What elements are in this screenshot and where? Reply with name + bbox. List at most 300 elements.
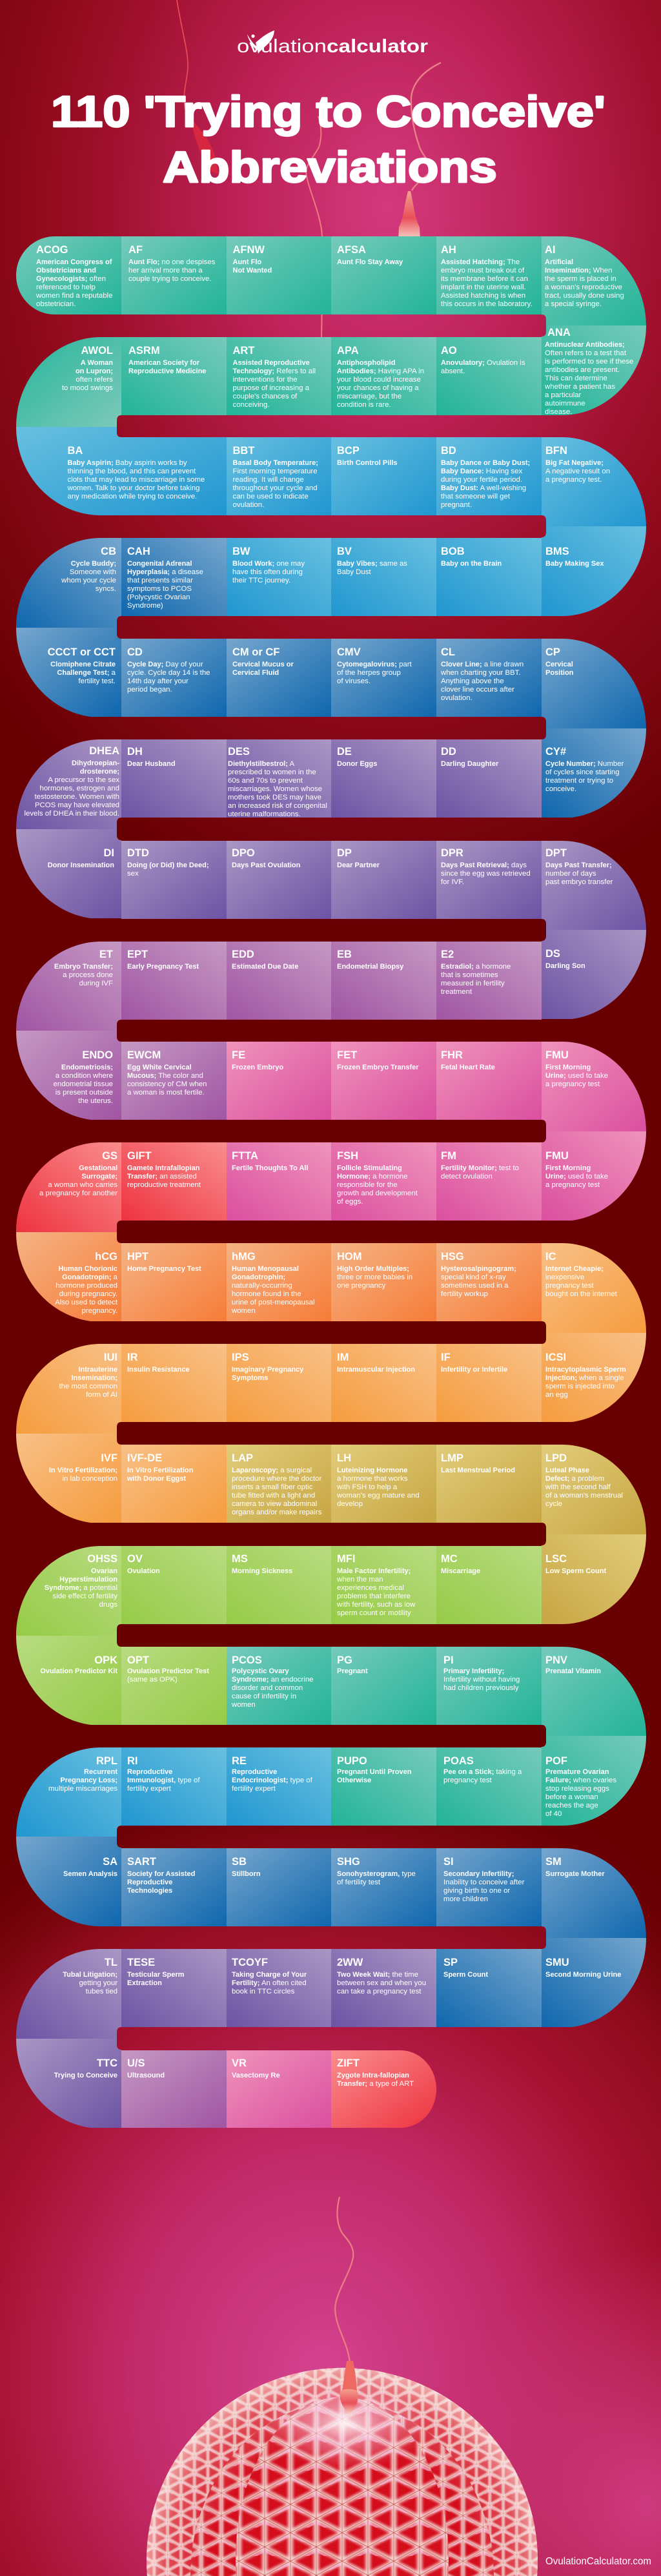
- row 6: CY#: treatment or trying to: [545, 776, 613, 784]
- row 19: VR: [227, 2050, 331, 2128]
- row 15: PCOS: Syndrome; an endocrine: [232, 1676, 314, 1684]
- row 15: PNV: PNV: [545, 1654, 567, 1666]
- row 13: LMP: LMP: [441, 1452, 463, 1464]
- row 11: IC: pregnancy test: [545, 1281, 594, 1289]
- row 16: POAS: POAS: [443, 1755, 474, 1767]
- row 1: AH: this occurs in the laboratory.: [441, 300, 533, 307]
- row 9: FMU: FMU: [545, 1049, 569, 1061]
- row 6: DH: DH: [127, 746, 143, 757]
- title: 110 'Trying to Conceive': [51, 87, 605, 136]
- row 2: ANA: Antinuclear Antibodies;: [545, 341, 625, 349]
- row 15: PI: Infertility without having: [443, 1676, 520, 1684]
- row 15: OPT: Ovulation Predictor Test: [127, 1667, 209, 1675]
- row 13: LH: [331, 1445, 436, 1523]
- row 4: BMS: [542, 526, 646, 616]
- row 5: CP: CP: [545, 646, 560, 658]
- row 16: POF: stop releasing eggs: [545, 1785, 609, 1793]
- row 10: FSH: FSH: [337, 1150, 358, 1162]
- title: [51, 87, 605, 192]
- row 11: hCG: [16, 1232, 121, 1321]
- row 15: PCOS: [227, 1647, 331, 1725]
- row 18: SMU: SMU: [545, 1957, 569, 1968]
- row 16: PUPO: Pregnant Until Proven: [337, 1768, 412, 1776]
- row 7: DTD: Doing (or Did) the Deed;: [127, 861, 209, 869]
- row 4: CAH: Syndrome): [127, 602, 163, 610]
- row 2: ANA: Often refers to a test that: [545, 349, 626, 356]
- row 2: AWOL: often refers: [76, 376, 113, 384]
- row 14: MFI: problems that interfere: [337, 1592, 411, 1600]
- row 3: BD: [436, 437, 542, 515]
- row 13: IVF: IVF: [101, 1452, 117, 1464]
- row 10: FMU: Urine; used to take: [545, 1173, 608, 1180]
- row 9: FMU: First Morning: [545, 1063, 591, 1071]
- row 10: FTTA: [227, 1142, 331, 1221]
- row 10: GS: [16, 1142, 121, 1232]
- row 13: LH: LH: [337, 1452, 351, 1464]
- row 5: CL: Anything above the: [441, 677, 504, 685]
- row 3: BFN: [542, 437, 646, 526]
- row 12: IUI: Insemination;: [71, 1374, 117, 1382]
- row 17: SI: more children: [443, 1895, 488, 1902]
- row 17: SART: Reproductive: [127, 1878, 172, 1886]
- row 12: IUI: IUI: [104, 1352, 117, 1363]
- row 12: ICSI: sperm is injected into: [545, 1382, 615, 1390]
- row 7: DPT: DPT: [545, 847, 567, 859]
- row 1: AI: a special syringe.: [545, 300, 602, 307]
- row 11: hCG: during pregnancy.: [59, 1290, 117, 1298]
- row 1: AF: couple trying to conceive.: [128, 275, 212, 283]
- row 8: E2: Estradiol; a hormone: [441, 962, 511, 970]
- row 14: OHSS: drugs: [99, 1600, 117, 1608]
- bottom sperm: [335, 2197, 353, 2362]
- row 6: DES: mothers took DES may have: [228, 793, 321, 801]
- row 11: IC: [542, 1243, 646, 1333]
- row 5: CD: Cycle Day; Day of your: [127, 660, 203, 668]
- row 8: E2: that is sometimes: [441, 971, 498, 979]
- row 11: IC: IC: [545, 1251, 556, 1262]
- row 4: BV: Baby Vibes; same as: [337, 559, 407, 567]
- row 19: TTC: TTC: [97, 2057, 117, 2069]
- row 1: AI: AI: [545, 244, 555, 256]
- row 18: SMU: [542, 1938, 646, 2027]
- row 2: AWOL: [16, 337, 121, 427]
- row 3: BBT: First morning temperature: [232, 468, 318, 475]
- row 7: DI: [16, 829, 121, 918]
- row 12: ICSI: Injection; when a single: [545, 1374, 624, 1382]
- row 2: ART: ART: [232, 345, 254, 356]
- row 5: CL: [436, 639, 542, 717]
- row 2: ANA: ANA: [547, 327, 571, 338]
- row 2: ANA: This can determine: [545, 375, 607, 382]
- row 18: TCOYF: Fertility; An often cited: [232, 1979, 307, 1986]
- row 17: SI: Secondary Infertility;: [443, 1870, 514, 1878]
- row 4: BW: Blood Work; one may: [232, 559, 305, 567]
- row 8: EPT: EPT: [127, 949, 148, 960]
- row 5: CM or CF: [227, 639, 331, 717]
- row 2: APA: APA: [337, 345, 359, 356]
- logo: [237, 30, 428, 57]
- row 14: OV: OV: [127, 1553, 143, 1565]
- row 5: CD: 14th day after your: [127, 677, 188, 685]
- row 17: SART: Technologies: [127, 1887, 172, 1895]
- row 6: DHEA: Dihydroepian-: [72, 759, 119, 767]
- row 2: ART: [227, 337, 331, 415]
- row 18: 2WW: can take a pregnancy test: [337, 1988, 421, 1995]
- egg: [142, 2364, 542, 2576]
- row 2: ASRM: [121, 337, 227, 415]
- row 15: PI: [436, 1647, 542, 1725]
- row 3: BCP: BCP: [337, 445, 360, 457]
- row 2: ART: purpose of increasing a: [232, 384, 309, 391]
- row 5: CP: [542, 639, 646, 728]
- row 19: ZIFT: ZIFT: [337, 2057, 360, 2069]
- title: Abbreviations: [163, 143, 497, 192]
- row 1: ACOG: obstetrician.: [36, 300, 76, 307]
- row 7: DPR: since the egg was retrieved: [441, 869, 531, 877]
- row 2: ANA: antibodies are present.: [545, 366, 620, 373]
- row 4: CAH: that presents similar: [127, 576, 193, 584]
- row 13: LMP: [436, 1445, 542, 1523]
- row 3: BD: Baby Dust: A well-wishing: [441, 484, 526, 492]
- row 11: hMG: naturally-occurring: [232, 1281, 292, 1289]
- row 17: SB: Stillborn: [232, 1870, 261, 1878]
- row 11: HSG: [436, 1243, 542, 1321]
- row 2: AO: absent.: [441, 367, 465, 375]
- row 18: TCOYF: book in TTC circles: [232, 1988, 294, 1995]
- row 1: ACOG: Gynecologists; often: [36, 275, 106, 283]
- row 11: hMG: hormone found in the: [232, 1290, 301, 1298]
- row 11: hMG: hMG: [232, 1251, 256, 1262]
- row 9: ENDO: Endometriosis;: [61, 1063, 113, 1071]
- row 17: SI: Inability to conceive after: [443, 1878, 524, 1886]
- row 1: AF: AF: [128, 244, 143, 256]
- row 16: RPL: Recurrent: [84, 1768, 117, 1776]
- row 17: SHG: of fertility test: [337, 1878, 380, 1886]
- row 3: BBT: [227, 437, 331, 515]
- row 16: POF: Premature Ovarian: [545, 1768, 609, 1776]
- row 8: EB: Endometrial Biopsy: [337, 962, 403, 970]
- row 4: BW: BW: [232, 546, 250, 557]
- row 3: BD: Baby Dance or Baby Dust;: [441, 459, 530, 466]
- row 9: FHR: [436, 1042, 542, 1120]
- row 13: LPD: Defect; a problem: [545, 1475, 604, 1483]
- row 11: IC: Internet Cheapie;: [545, 1264, 604, 1272]
- row 4: BW: have this often during: [232, 568, 303, 576]
- row 1: AF: [121, 236, 227, 314]
- row 9: ENDO: endometrial tissue: [54, 1080, 113, 1087]
- row 11: hCG: pregnancy.: [81, 1307, 117, 1315]
- row 10: GIFT: GIFT: [127, 1150, 152, 1162]
- row 11: HOM: three or more babies in: [337, 1273, 412, 1281]
- row 10: GS: a pregnancy for another: [39, 1190, 117, 1197]
- row 3: BCP: [331, 437, 436, 515]
- row 4: CB: Someone with: [70, 568, 116, 576]
- row 7: DP: DP: [337, 847, 352, 859]
- row 19: ZIFT: Transfer; a type of ART: [337, 2079, 414, 2087]
- row 9: FMU: a pregnancy test: [545, 1080, 600, 1087]
- row 16: RI: Reproductive: [127, 1768, 172, 1776]
- row 10: GS: Gestational: [79, 1164, 117, 1171]
- row 1: AFNW: Aunt Flo: [232, 258, 261, 266]
- row 8: DS: DS: [545, 948, 560, 960]
- row 9: EWCM: consistency of CM when: [127, 1080, 207, 1087]
- row 13: IVF: in lab conception: [62, 1475, 117, 1483]
- row 14: MFI: Male Factor Infertility;: [337, 1567, 411, 1574]
- logo: calculator: [327, 36, 428, 57]
- row 9: ENDO: is present outside: [56, 1089, 113, 1097]
- row 6: DE: [331, 739, 436, 818]
- row 14: MS: Morning Sickness: [232, 1567, 292, 1574]
- row 14: MC: [436, 1546, 542, 1624]
- row 13: LAP: procedure where the doctor: [232, 1475, 321, 1483]
- row 3: BA: women. Talk to your doctor before taking: [67, 484, 199, 492]
- row 16: RPL: multiple miscarriages: [48, 1785, 117, 1793]
- row 3: BD: BD: [441, 445, 456, 457]
- row 1: AH: [436, 236, 542, 314]
- row 12: IR: Insulin Resistance: [127, 1365, 190, 1373]
- row 9: EWCM: Mucous; The color and: [127, 1072, 203, 1080]
- row 18: SP: Sperm Count: [443, 1971, 488, 1979]
- row 15: PCOS: PCOS: [232, 1654, 262, 1666]
- row 4: CB: [16, 538, 121, 628]
- row 11: IC: inexpensive: [545, 1273, 584, 1281]
- row 1: ACOG: [16, 236, 121, 314]
- row 1: AH: embryo must break out of: [441, 266, 524, 274]
- row 8: ET: Embryo Transfer;: [54, 962, 113, 970]
- row 16: RI: Immunologist, type of: [127, 1777, 200, 1784]
- row 14: MFI: [331, 1546, 436, 1624]
- row 5: CMV: of viruses.: [337, 677, 371, 685]
- row 1: AH: implant in the uterine wall.: [441, 283, 526, 291]
- row 7: DPT: number of days: [545, 869, 596, 877]
- row 5: CM or CF: Cervical Mucus or: [232, 660, 294, 668]
- row 11: hMG: urine of post-menopausal: [232, 1298, 315, 1306]
- row 1: AFSA: [331, 236, 436, 314]
- row 9: FET: Frozen Embryo Transfer: [337, 1063, 419, 1071]
- row 12: IR: IR: [127, 1352, 138, 1363]
- row 13: IVF-DE: IVF-DE: [127, 1452, 162, 1464]
- row 15: PCOS: disorder and common: [232, 1684, 303, 1692]
- row 14: MS: MS: [232, 1553, 248, 1565]
- row 5: CMV: of the herpes group: [337, 669, 401, 677]
- row 13: LPD: Luteal Phase: [545, 1466, 589, 1474]
- row 2: APA: [331, 337, 436, 415]
- row 12: IUI: Intrauterine: [78, 1365, 117, 1373]
- row 18: TL: TL: [105, 1957, 117, 1968]
- row 5: CD: [121, 639, 227, 717]
- row 3: BBT: ovulation.: [232, 501, 264, 509]
- row 10: GS: GS: [102, 1150, 117, 1162]
- row 12: IF: [436, 1344, 542, 1422]
- row 3: BFN: Big Fat Negative;: [545, 459, 604, 466]
- row 13: IVF: [16, 1434, 121, 1523]
- row 1: AH: AH: [441, 244, 456, 256]
- row 15: PG: Pregnant: [337, 1667, 368, 1675]
- row 6: DES: Diethylstilbestrol; A: [228, 759, 294, 767]
- row 8: EPT: [121, 942, 227, 1020]
- row 1: AI: the sperm is placed in: [545, 275, 616, 283]
- row 7: DPO: Days Past Ovulation: [232, 861, 300, 869]
- row 2: ANA: whether a patient has: [545, 382, 615, 390]
- row 12: IM: [331, 1344, 436, 1422]
- row 7: DPO: [227, 841, 331, 919]
- row 5: CCCT or CCT: CCCT or CCT: [48, 646, 116, 658]
- row 16: RPL: [16, 1747, 121, 1837]
- row 13: LPD: of a woman's menstrual: [545, 1492, 623, 1499]
- row 6: DHEA: hormones, estrogen and: [40, 784, 119, 792]
- row 13: LH: woman's egg mature and: [337, 1492, 420, 1499]
- row 18: TCOYF: TCOYF: [232, 1957, 268, 1968]
- row 8: E2: measured in fertility: [441, 979, 505, 987]
- row 17: SART: SART: [127, 1856, 156, 1868]
- row 13: LH: with FSH to help a: [337, 1483, 397, 1490]
- sperm 2: [306, 116, 322, 337]
- row 16: POF: before a woman: [545, 1793, 598, 1801]
- row 9: ENDO: ENDO: [82, 1049, 113, 1061]
- row 7: DPT: past embryo transfer: [545, 878, 613, 886]
- row 19: U/S: Ultrasound: [127, 2072, 165, 2079]
- row 11: hCG: Human Chorionic: [58, 1264, 117, 1272]
- row 17: SI: [436, 1848, 542, 1926]
- row 7: DTD: sex: [127, 869, 139, 877]
- row 10: FM: [436, 1142, 542, 1221]
- row 3: BCP: Birth Control Pills: [337, 459, 398, 466]
- row 14: LSC: [542, 1534, 646, 1624]
- sperm 3: [398, 63, 441, 240]
- row 16: RE: RE: [232, 1755, 247, 1767]
- row 13: LAP: [227, 1445, 331, 1523]
- row 4: BOB: BOB: [441, 546, 465, 557]
- row 4: BMS: Baby Making Sex: [545, 559, 604, 567]
- row 13: LAP: organs and/or make repairs: [232, 1509, 321, 1516]
- row 5: CP: Position: [545, 669, 573, 677]
- row 2: APA: miscarriage, but the: [337, 393, 402, 400]
- row 7: DTD: [121, 841, 227, 919]
- row 9: ENDO: the uterus.: [78, 1097, 113, 1104]
- row 1: AI: tract, usually done using: [545, 292, 624, 300]
- row 17: SI: giving birth to one or: [443, 1887, 510, 1895]
- row 15: OPT: (same as OPK): [127, 1676, 178, 1684]
- row 8: EDD: Estimated Due Date: [232, 962, 298, 970]
- row 19: VR: Vasectomy Re: [232, 2072, 280, 2079]
- row 6: DD: [436, 739, 542, 818]
- row 15: PCOS: Polycystic Ovary: [232, 1667, 289, 1675]
- row 13: LMP: Last Menstrual Period: [441, 1466, 515, 1474]
- row 13: LAP: Laparoscopy; a surgical: [232, 1466, 312, 1474]
- row 1: AH: its membrane before it can: [441, 275, 528, 283]
- row 10: FTTA: Fertile Thoughts To All: [232, 1164, 309, 1171]
- row 9: FE: FE: [232, 1049, 245, 1061]
- row 13: LAP: inserts a small fiber optic: [232, 1483, 312, 1490]
- row 6: DHEA: A precursor to the sex: [48, 776, 119, 784]
- row 14: MFI: with fertility, such as low: [337, 1600, 415, 1608]
- row 2: ASRM: ASRM: [128, 345, 160, 356]
- row 1: AFNW: [227, 236, 331, 314]
- row 13: LH: develop: [337, 1499, 363, 1507]
- row 5: CL: ovulation.: [441, 694, 473, 701]
- row 8: ET: [16, 942, 121, 1031]
- row 11: hCG: Gonadotropin; a: [62, 1273, 117, 1281]
- row 11: HPT: Home Pregnancy Test: [127, 1264, 201, 1272]
- row 4: CAH: Congenital Adrenal: [127, 559, 192, 567]
- row 6: DHEA: levels of DHEA in their blood.: [24, 810, 119, 818]
- row 7: DPR: for IVF.: [441, 878, 464, 886]
- row 18: TESE: Testicular Sperm: [127, 1971, 184, 1979]
- row 15: PG: [331, 1647, 436, 1725]
- row 19: ZIFT: Zygote Intra-fallopian: [337, 2072, 409, 2079]
- row 10: FTTA: FTTA: [232, 1150, 258, 1162]
- row 18: 2WW: Two Week Wait; the time: [337, 1971, 418, 1979]
- row 4: CB: whom your cycle: [61, 576, 116, 584]
- row 1: AF: Aunt Flo; no one despises: [128, 258, 215, 266]
- row 16: RE: Reproductive: [232, 1768, 277, 1776]
- row 15: PCOS: women: [232, 1701, 256, 1709]
- row 9: FMU: [542, 1042, 646, 1131]
- row 14: MC: Miscarriage: [441, 1567, 480, 1574]
- row 5: CCCT or CCT: [16, 628, 121, 717]
- row 13: LH: a hormone that works: [337, 1475, 408, 1483]
- row 2: AO: Anovulatory; Ovulation is: [441, 359, 525, 367]
- row 3: BD: pregnant.: [441, 501, 472, 509]
- row 5: CMV: Cytomegalovirus; part: [337, 660, 412, 668]
- row 4: CAH: symptoms to PCOS: [127, 585, 192, 593]
- row 8: EDD: [227, 942, 331, 1020]
- row 1: AF: her arrival more than a: [128, 266, 203, 274]
- row 17: SI: SI: [443, 1856, 454, 1868]
- row 13: LH: Luteinizing Hormone: [337, 1466, 407, 1474]
- row 6: DE: Donor Eggs: [337, 759, 377, 767]
- row 18: TCOYF: Taking Charge of Your: [232, 1971, 307, 1979]
- row 4: BOB: [436, 538, 542, 616]
- row 11: HOM: HOM: [337, 1251, 361, 1262]
- row 9: FET: [331, 1042, 436, 1120]
- row 1: AFNW: Not Wanted: [232, 266, 272, 274]
- row 1: AH: Assisted Hatching; The: [441, 258, 520, 266]
- row 2: APA: your chances of having a: [337, 384, 419, 391]
- row 3: BA: any medication while trying to conceive.: [67, 492, 197, 500]
- row 8: DS: [542, 930, 646, 1019]
- row 9: FHR: FHR: [441, 1049, 463, 1061]
- row 16: PUPO: PUPO: [337, 1755, 367, 1767]
- row 8: E2: treatment: [441, 988, 472, 996]
- row 12: IPS: [227, 1344, 331, 1422]
- row 3: BA: clots that may lead to miscarriage in some: [67, 475, 205, 483]
- row 14: MFI: sperm count or motility: [337, 1609, 411, 1617]
- row 6: DD: DD: [441, 746, 456, 757]
- row 2: ART: couple's chances of: [232, 393, 297, 400]
- row 3: BBT: reading. It will change: [232, 475, 304, 483]
- row 2: ANA: [542, 325, 646, 415]
- row 13: LPD: LPD: [545, 1452, 567, 1464]
- row 16: POF: reaches the age: [545, 1802, 598, 1809]
- sperm head on egg: [340, 2361, 358, 2415]
- row 11: HOM: High Order Multiples;: [337, 1264, 409, 1272]
- row 10: FM: detect ovulation: [441, 1173, 493, 1180]
- row 8: E2: E2: [441, 949, 454, 960]
- row 15: PI: had children previously: [443, 1684, 519, 1692]
- row 2: AWOL: A Woman: [81, 359, 113, 367]
- row 17: SB: [227, 1848, 331, 1926]
- row 12: IPS: IPS: [232, 1352, 249, 1363]
- row 6: DHEA: testosterone. Women with: [35, 793, 119, 801]
- row 19: VR: VR: [232, 2057, 247, 2069]
- row 12: ICSI: ICSI: [545, 1352, 566, 1363]
- row 2: APA: your blood could increase: [337, 376, 421, 384]
- row 7: DP: Dear Partner: [337, 861, 380, 869]
- row 11: hMG: [227, 1243, 331, 1321]
- row 17: SHG: SHG: [337, 1856, 360, 1868]
- row 10: FSH: growth and development: [337, 1190, 418, 1197]
